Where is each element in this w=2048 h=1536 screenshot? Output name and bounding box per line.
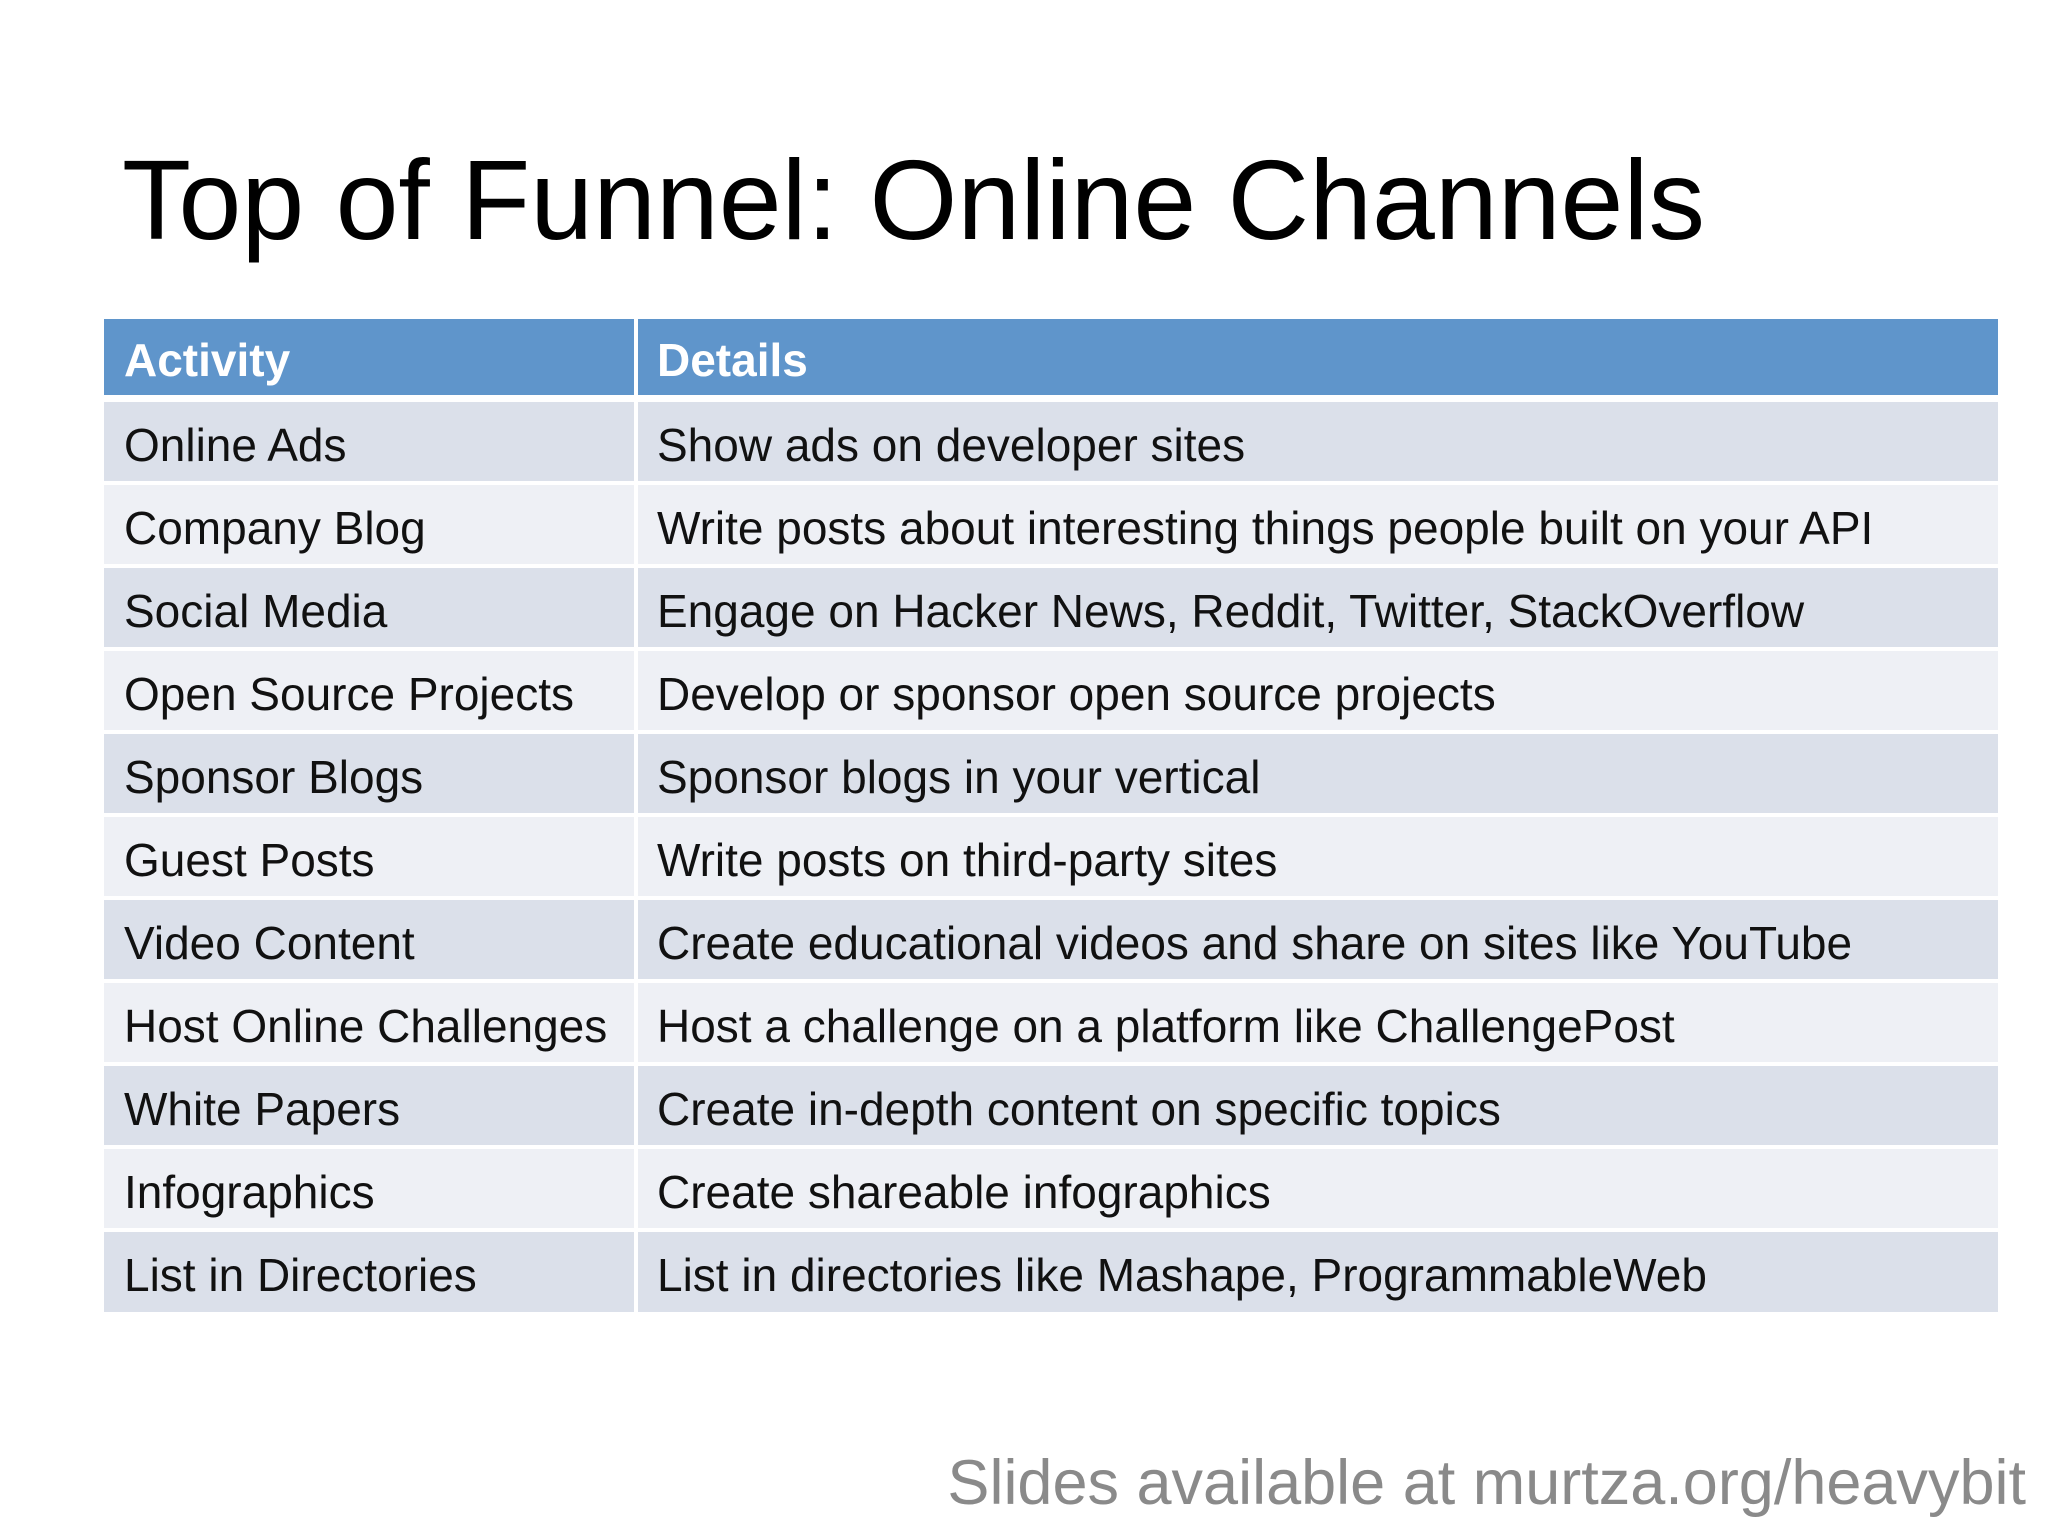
row: Sponsor Blogs: Sponsor blogs in your vertical bbox=[657, 750, 1260, 802]
row: Infographics: Create shareable infographics bbox=[657, 1166, 1271, 1218]
row: White Papers: Create in-depth content on specific topics bbox=[657, 1082, 1501, 1134]
row: Host Online Challenges: Host a challenge on a platform like ChallengePost bbox=[657, 1000, 1675, 1052]
row: Infographics: Infographics bbox=[124, 1166, 375, 1218]
row: Company Blog: Company Blog bbox=[124, 502, 426, 554]
row: Online Ads: Show ads on developer sites bbox=[657, 418, 1245, 470]
row: Video Content: Create educational videos and share on sites like YouTube bbox=[657, 916, 1852, 968]
row: Online Ads: Online Ads bbox=[124, 418, 346, 470]
row: Sponsor Blogs: Sponsor Blogs bbox=[124, 750, 423, 802]
row: Social Media: Social Media bbox=[124, 584, 387, 636]
row: List in Directories: List in Directories bbox=[124, 1249, 477, 1301]
table header bbox=[104, 319, 1998, 395]
row: Infographics bbox=[104, 1149, 1998, 1228]
row: Sponsor Blogs bbox=[104, 734, 1998, 813]
table: online channels bbox=[104, 319, 1998, 1312]
row: Open Source Projects: Develop or sponsor open source projects bbox=[657, 668, 1496, 720]
row: Host Online Challenges bbox=[104, 983, 1998, 1062]
title: Top of Funnel: Online Channels bbox=[122, 137, 1705, 263]
row: Online Ads bbox=[104, 402, 1998, 481]
row: Host Online Challenges: Host Online Challenges bbox=[124, 1000, 607, 1052]
row: Social Media: Engage on Hacker News, Reddit, Twitter, StackOverflow bbox=[657, 584, 1804, 636]
table header: Activity bbox=[124, 334, 290, 386]
row: White Papers: White Papers bbox=[124, 1082, 400, 1134]
row: Company Blog bbox=[104, 485, 1998, 564]
footer note: Slides available at murtza.org/heavybit bbox=[947, 1448, 2026, 1518]
row: Video Content: Video Content bbox=[124, 916, 415, 968]
row: Company Blog: Write posts about interesting things people built on your API bbox=[657, 502, 1873, 554]
row: Video Content bbox=[104, 900, 1998, 979]
row: Guest Posts: Guest Posts bbox=[124, 834, 375, 886]
row: White Papers bbox=[104, 1066, 1998, 1145]
row: Guest Posts bbox=[104, 817, 1998, 896]
table header: Details bbox=[657, 334, 808, 386]
row: List in Directories: List in directories like Mashape, ProgrammableWeb bbox=[657, 1249, 1707, 1301]
row: Open Source Projects bbox=[104, 651, 1998, 730]
row: Social Media bbox=[104, 568, 1998, 647]
row: Guest Posts: Write posts on third-party sites bbox=[657, 834, 1277, 886]
row: List in Directories bbox=[104, 1232, 1998, 1312]
row: Open Source Projects: Open Source Projects bbox=[124, 668, 574, 720]
